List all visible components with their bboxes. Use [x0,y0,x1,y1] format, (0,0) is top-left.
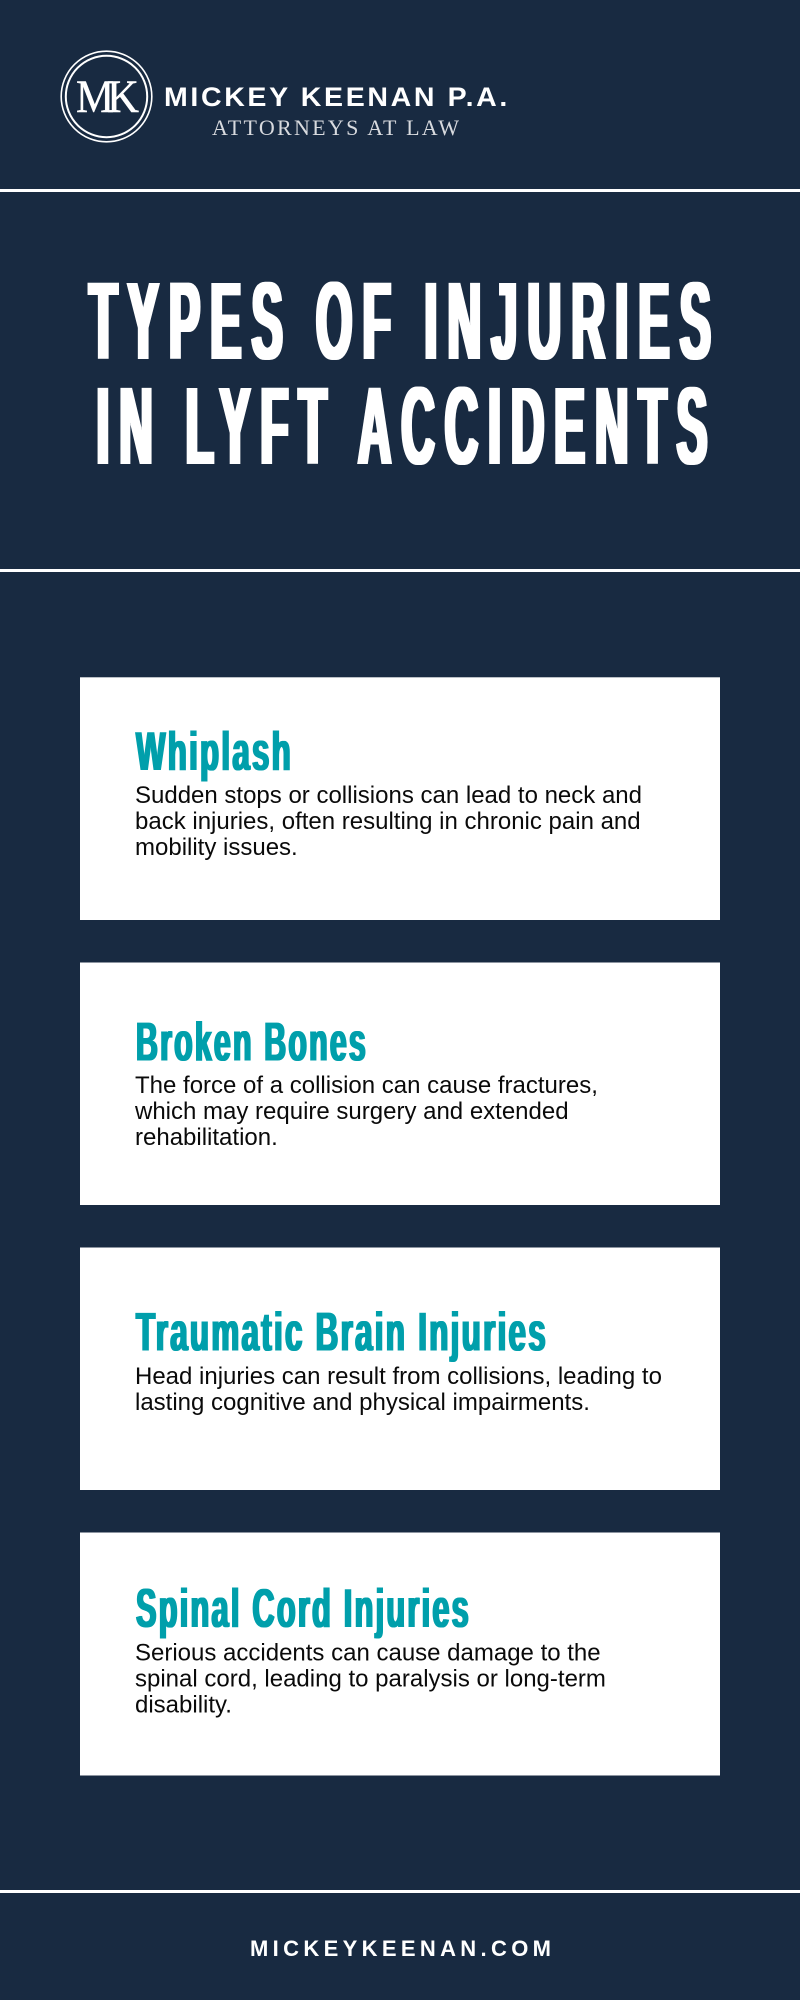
footer website: MICKEYKEENAN.COM [250,1936,551,1961]
text: traumatic brain injuries description: Head injuries can result from collisions, leading to [135,1363,662,1390]
firm name: MICKEY KEENAN P.A. [164,82,510,112]
text: whiplash description: Sudden stops or collisions can lead to neck and [135,782,642,809]
icon: MK monogram [61,51,152,142]
text: broken bones description: The force of a collision can cause fractures, [135,1072,598,1099]
icon: MK monogram: K [107,71,139,123]
panel: whiplash [80,677,720,920]
text: broken bones description: rehabilitation. [135,1124,278,1151]
logo [61,51,510,142]
panel: spinal cord injuries [80,1532,720,1776]
title [89,260,721,488]
heading: broken bones: Broken Bones [136,1010,368,1072]
firm tagline: ATTORNEYS AT LAW [212,115,459,140]
text: spinal cord injuries description: disability. [135,1692,232,1718]
icon: MK monogram: M [76,71,114,123]
heading: whiplash: Whiplash [136,720,293,782]
text: whiplash description: back injuries, often resulting in chronic pain and [135,808,641,835]
text: spinal cord injuries description: Serious accidents can cause damage to the [135,1640,601,1666]
text: spinal cord injuries description: spinal cord, leading to paralysis or long-term [135,1666,606,1692]
heading: spinal cord injuries: Spinal Cord Injuries [136,1577,471,1639]
panel: broken bones [80,962,720,1205]
text: traumatic brain injuries description: lasting cognitive and physical impairments. [135,1389,590,1416]
text: whiplash description: mobility issues. [135,834,298,861]
panel: traumatic brain injuries [80,1248,720,1490]
text: broken bones description: which may require surgery and extended [134,1098,569,1125]
